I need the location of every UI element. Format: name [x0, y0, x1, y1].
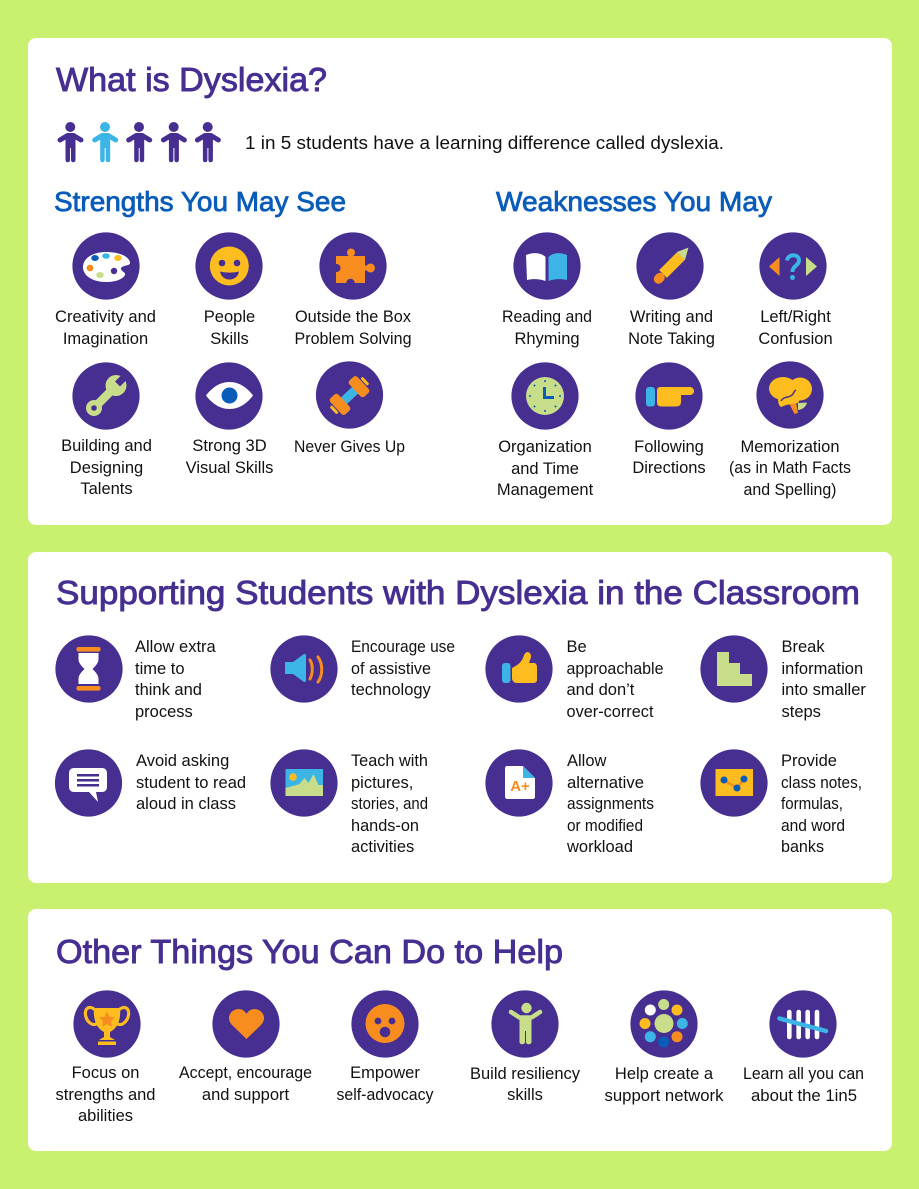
label: 3D visual: Visual Skills — [186, 459, 273, 477]
panel: supporting students — [28, 552, 892, 883]
label: self-advocacy: self-advocacy — [336, 1086, 434, 1104]
label: building: Designing — [70, 459, 143, 477]
title: supporting students: Supporting Students with Dyslexia in the Classroom — [56, 574, 860, 611]
text: teach with pictures: Teach with — [351, 752, 428, 770]
label: reading — [502, 308, 592, 348]
text: assistive technology: Encourage use — [351, 638, 455, 656]
text: allow extra time: think and — [135, 681, 202, 699]
label: focus on strengths — [56, 1064, 155, 1125]
label: people skills: Skills — [210, 330, 249, 348]
icon: brain — [756, 361, 824, 429]
label: learn about 1in5 — [743, 1065, 864, 1105]
icon: palette — [72, 232, 140, 300]
label: outside the box: Problem Solving — [294, 330, 412, 348]
text: alternative assignments: workload — [566, 838, 633, 856]
label: resiliency: Build resiliency — [470, 1065, 581, 1083]
label: learn about 1in5: about the 1in5 — [751, 1087, 857, 1105]
label: creativity — [55, 308, 156, 348]
text: alternative assignments: or modified — [567, 817, 643, 835]
heading: weaknesses: Weaknesses You May — [496, 186, 772, 217]
icon: graded paper: A+ — [510, 778, 530, 795]
text: approachable: Be — [566, 638, 587, 656]
label: reading: Reading and — [502, 308, 592, 326]
label: left right: Confusion — [758, 330, 833, 348]
label: organization: Organization — [498, 438, 592, 456]
label: following directions: Following — [634, 438, 704, 456]
text: avoid reading aloud: Avoid asking — [136, 752, 229, 770]
text: approachable: approachable — [566, 660, 664, 678]
label: self-advocacy — [336, 1064, 434, 1104]
label: accept — [179, 1064, 312, 1104]
text: teach with pictures: stories, and — [351, 795, 428, 813]
icon: speech bubble — [55, 749, 122, 817]
label: resiliency — [470, 1065, 581, 1104]
text: class notes: Provide — [781, 752, 837, 770]
label: writing: Note Taking — [628, 330, 715, 348]
label: organization: and Time — [511, 460, 579, 478]
text: teach with pictures: hands-on — [351, 817, 419, 835]
icon: clock — [511, 362, 579, 430]
text: alternative assignments: alternative — [567, 774, 644, 792]
icon: eye — [195, 362, 263, 430]
label: memorization: Memorization — [740, 438, 840, 456]
label: memorization: (as in Math Facts — [729, 459, 851, 477]
icon: hourglass — [55, 635, 123, 703]
label: memorization: and Spelling) — [744, 481, 836, 499]
label: creativity: Imagination — [63, 330, 148, 348]
icon: smiley — [195, 232, 263, 300]
label: accept: Accept, encourage — [179, 1064, 312, 1082]
text: smaller steps — [782, 638, 866, 721]
icon: puzzle piece — [319, 232, 387, 300]
icon: support network — [630, 990, 698, 1058]
text: assistive technology: of assistive — [351, 660, 431, 678]
text: smaller steps: steps — [782, 703, 821, 721]
text: alternative assignments — [566, 752, 654, 856]
label: building — [61, 437, 152, 498]
icon: tally marks — [769, 990, 837, 1058]
text: alternative assignments: assignments — [567, 795, 654, 813]
text: allow extra time: Allow extra — [135, 638, 217, 656]
icon: five students, one highlighted — [60, 122, 218, 162]
label: organization — [497, 438, 594, 499]
label: focus on strengths: abilities — [78, 1107, 133, 1125]
icon: graded paper — [485, 749, 553, 817]
label: memorization — [729, 438, 851, 499]
text: class notes: banks — [781, 838, 824, 856]
label: people skills: People — [204, 308, 255, 326]
icon: picture — [270, 749, 338, 817]
label: support network: support network — [604, 1087, 724, 1105]
label: outside the box: Outside the Box — [295, 308, 412, 326]
icon: trophy — [73, 990, 141, 1058]
icon: pencil — [636, 232, 704, 300]
label: accept: and support — [202, 1086, 289, 1104]
label: outside the box — [294, 308, 412, 348]
icon: person arms raised — [491, 990, 559, 1058]
text: allow extra time: process — [135, 703, 193, 721]
label: people skills — [204, 308, 255, 348]
text: avoid reading aloud — [136, 752, 246, 813]
label: following directions: Directions — [632, 459, 706, 477]
label: following directions — [632, 438, 706, 477]
text: approachable — [566, 638, 664, 721]
label: building: Building and — [61, 437, 152, 455]
text: teach with pictures: activities — [351, 838, 414, 856]
label: self-advocacy: Empower — [350, 1064, 420, 1082]
text: class notes — [781, 752, 862, 856]
icon: left right question — [759, 232, 827, 300]
text: smaller steps: information — [782, 660, 863, 678]
heading: strengths: Strengths You May See — [54, 186, 346, 217]
title: What is Dyslexia: What is Dyslexia? — [56, 61, 327, 98]
text: class notes: class notes, — [781, 774, 862, 792]
label: left right — [758, 308, 833, 348]
label: organization: Management — [497, 481, 594, 499]
text: assistive technology — [351, 638, 455, 699]
text: smaller steps: into smaller — [782, 681, 866, 699]
text: allow extra time: time to — [135, 660, 185, 678]
text: avoid reading aloud: aloud in class — [136, 795, 236, 813]
icon: dumbbell — [316, 361, 383, 429]
label: resiliency: skills — [507, 1086, 543, 1104]
icon: stair steps — [700, 635, 768, 703]
text: class notes: formulas, — [781, 795, 843, 813]
icon: chalkboard — [700, 749, 768, 817]
panel: what is dyslexia — [28, 38, 892, 525]
icon: wrench — [72, 362, 140, 430]
text: allow extra time — [135, 638, 217, 721]
icon: speaker — [270, 635, 338, 703]
icon: pointing hand — [635, 362, 703, 430]
text: class notes: and word — [781, 817, 845, 835]
text: teach with pictures — [351, 752, 428, 856]
icon: heart — [212, 990, 280, 1058]
label: never gives up: Never Gives Up — [294, 438, 405, 456]
icon: open book — [513, 232, 581, 300]
label: support network — [604, 1065, 724, 1105]
label: building: Talents — [80, 480, 133, 498]
label: creativity: Creativity and — [55, 308, 156, 326]
intro sentence: 1 in 5 students have a learning difference called dyslexia. — [245, 133, 724, 153]
label: reading: Rhyming — [514, 330, 580, 348]
label: 3D visual: Strong 3D — [192, 437, 267, 455]
label: writing — [628, 308, 715, 348]
text: assistive technology: technology — [351, 681, 432, 699]
label: writing: Writing and — [630, 308, 713, 326]
text: teach with pictures: pictures, — [351, 774, 413, 792]
label: focus on strengths: strengths and — [56, 1086, 155, 1104]
icon: thumbs up — [485, 635, 553, 703]
text: approachable: over-correct — [566, 703, 654, 721]
panel: other things — [28, 909, 892, 1151]
label: 3D visual — [186, 437, 273, 477]
text: approachable: and don’t — [566, 681, 635, 699]
label: left right: Left/Right — [760, 308, 831, 326]
icon: surprised face — [351, 990, 419, 1058]
text: avoid reading aloud: student to read — [136, 774, 246, 792]
text: alternative assignments: Allow — [567, 752, 607, 770]
text: smaller steps: Break — [782, 638, 825, 656]
title: other things: Other Things You Can Do to Help — [56, 933, 563, 970]
label: learn about 1in5: Learn all you can — [743, 1065, 864, 1083]
label: support network: Help create a — [615, 1065, 714, 1083]
label: focus on strengths: Focus on — [72, 1064, 139, 1082]
